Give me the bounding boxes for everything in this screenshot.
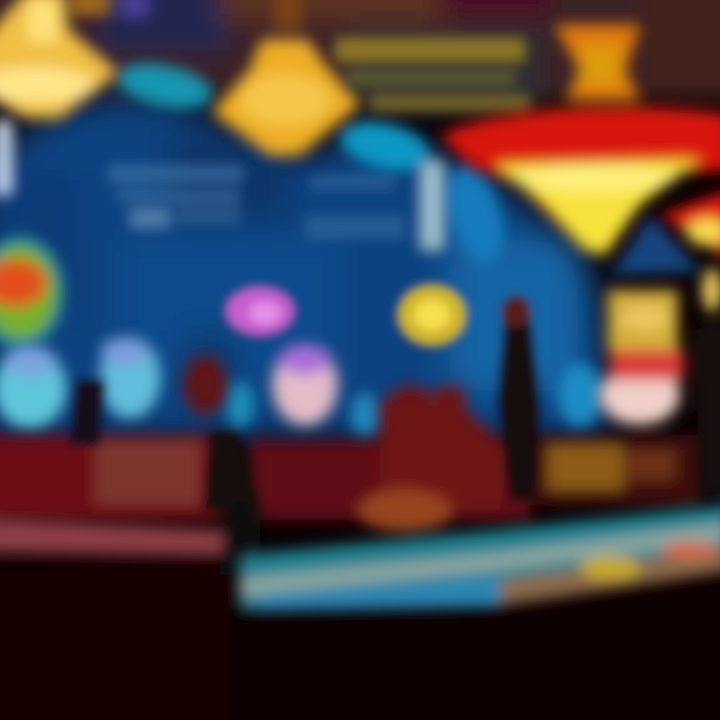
backdrop highlights: cyan arches (114, 56, 602, 437)
icon: left circle (0, 236, 64, 348)
blurred backdrop captions (108, 165, 405, 239)
bowl on table (357, 488, 453, 532)
lamp: top left (0, 0, 150, 118)
figure head (502, 296, 530, 328)
icon: pink badge (226, 287, 294, 335)
lamp: right red and yellow (440, 25, 720, 255)
hanging light column (420, 160, 444, 250)
background: ceiling (0, 0, 720, 110)
background: blue backdrop (0, 98, 610, 440)
audience heads (183, 355, 466, 425)
blurred heading (335, 38, 530, 111)
table: teal and white stripes (240, 505, 720, 610)
lower dark floor (0, 505, 720, 720)
left vertical light (0, 120, 12, 195)
blue roof shape, right (610, 215, 702, 275)
icon: yellow badge (398, 285, 466, 345)
lamp: centre (212, 0, 360, 155)
dark figures (70, 320, 720, 510)
left ledge (0, 518, 225, 556)
audience band: maroon seats (0, 395, 700, 520)
screens: glowing columns (0, 290, 684, 428)
lamp: far right (660, 190, 720, 312)
